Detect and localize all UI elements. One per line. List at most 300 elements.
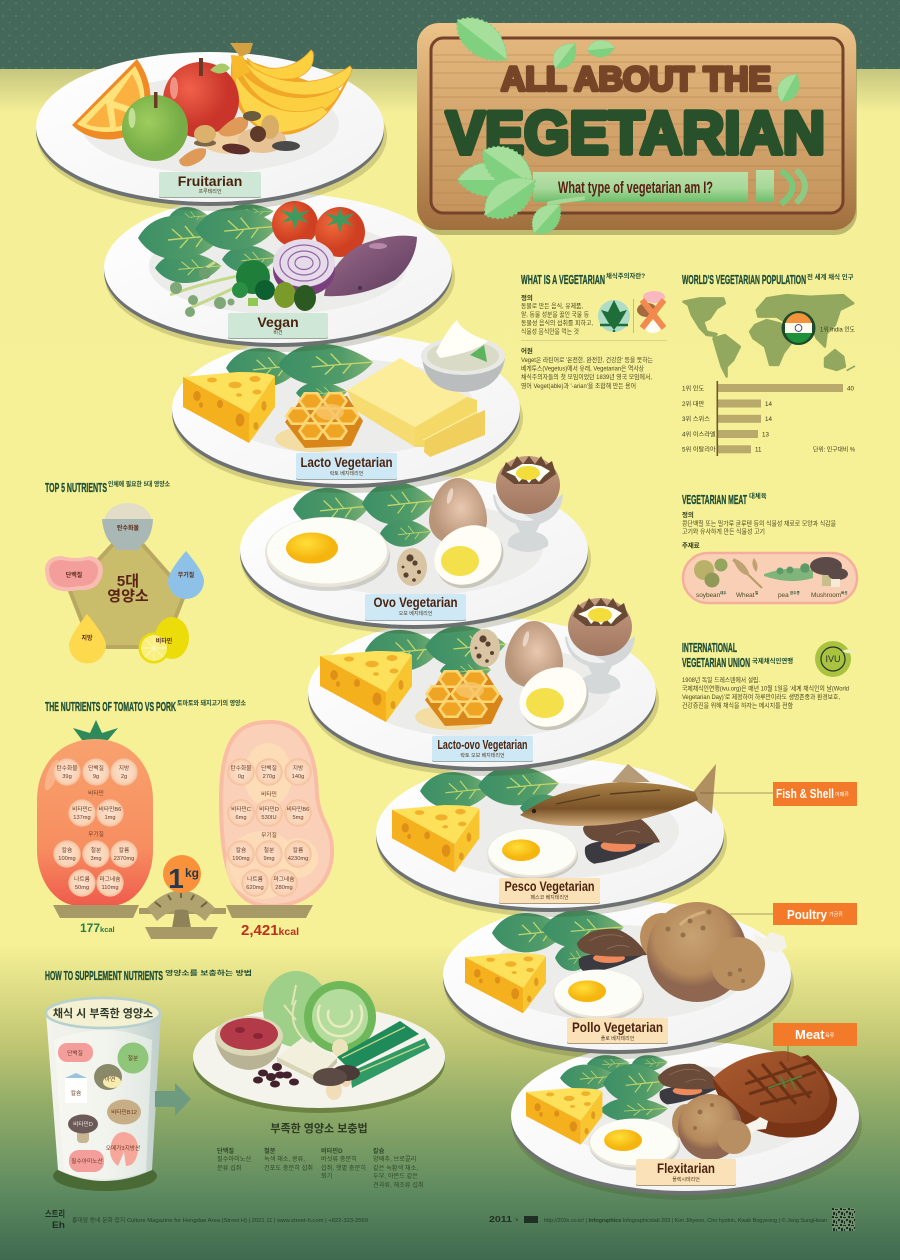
title line two: VEGETARIAN [446, 100, 825, 166]
weight: 1kg: kg [185, 866, 199, 880]
column: calcium: 두부, 아몬드 같은 [373, 1172, 418, 1180]
tomato values: 9g [93, 774, 99, 780]
tomato values: 칼슘 [62, 846, 72, 854]
label: vegan [228, 313, 328, 339]
plate: flexitarian [511, 1041, 862, 1200]
pork values: 단백질 [261, 764, 277, 772]
icon: protein: 단백질 [66, 571, 82, 579]
label: lacto: Lacto Vegetarian [300, 454, 392, 470]
lettuce [263, 971, 329, 1047]
label: pollo: 폴로 베지테리언 [601, 1035, 635, 1042]
roast chicken [640, 902, 787, 1002]
sweet potato [324, 236, 417, 296]
title line one: ALL ABOUT THE [501, 60, 771, 98]
column: iron: 건포도 충분히 섭취 [264, 1164, 313, 1172]
herbs [170, 262, 270, 317]
icon: fat drop: 지방 [81, 634, 93, 642]
fried egg [589, 1118, 680, 1170]
bar chart: 13 [762, 432, 769, 438]
half boiled egg [509, 656, 599, 742]
label: flexitarian [636, 1159, 736, 1186]
icon: rice bowl [102, 503, 153, 550]
tofu [277, 1038, 337, 1082]
panel: tomato vs pork [37, 698, 332, 939]
label: pesco: Pesco Vegetarian [504, 878, 594, 894]
cabbage [304, 981, 376, 1057]
nuts [179, 111, 300, 166]
definition text: 식물성 음식만을 먹는 것 [521, 326, 579, 336]
ingredient labels [696, 590, 848, 599]
icon: mineral drop [168, 551, 204, 599]
bananas [230, 43, 352, 134]
subtitle bar: What type of vegetarian am I? [558, 178, 713, 197]
protein [58, 1043, 93, 1062]
definition text: 알, 동물 성분을 끓인 국물 등 [521, 310, 589, 318]
plate caption: 부족한 영양소 보충법 [270, 1121, 368, 1135]
icon: leaves [448, 8, 805, 241]
pork values: 비타민C [231, 805, 251, 813]
heading: TOP 5 NUTRIENTS [45, 480, 107, 495]
label: lacto: 락토 베지테리언 [330, 470, 364, 477]
scale [53, 890, 313, 939]
logo: 2011: 2011 [489, 1215, 513, 1224]
pork values: 나트륨 [247, 875, 263, 883]
tag: poultry: 가금류 [829, 911, 843, 918]
logo: street h: 스트리 [45, 1209, 65, 1219]
ingredient labels: 밀 [755, 590, 758, 595]
amino acids: 필수아미노산 [71, 1157, 103, 1165]
heading: INTERNATIONAL [682, 640, 737, 655]
pork values: 탄수화물 [231, 764, 251, 772]
steak [713, 1051, 837, 1138]
onion [273, 239, 335, 296]
vitamin D: 비타민D [73, 1120, 93, 1128]
heading [682, 640, 793, 670]
center label [107, 573, 149, 605]
body text [682, 675, 849, 710]
icon: ivu logo [815, 641, 855, 677]
butter [347, 358, 485, 457]
label: vegan: Vegan [257, 314, 299, 330]
definition: 주재료 [682, 540, 700, 550]
tomato values: 50mg [75, 885, 89, 891]
honeycomb [275, 392, 363, 452]
column: vitamin D: 비타민D [321, 1147, 343, 1155]
black beans [253, 1063, 299, 1088]
cheese [392, 805, 479, 872]
tomato values: 3mg [90, 856, 102, 862]
definition [682, 510, 836, 550]
tomato values: 단백질 [88, 764, 104, 772]
label: india: 1위 India 인도 [820, 326, 855, 334]
definition: 콩단백질 또는 밀가루 글루텐 등의 식물성 재료로 모양과 식감을 [682, 518, 836, 528]
heading: HOW TO SUPPLEMENT NUTRIENTS [45, 968, 163, 983]
pork values: 140g [292, 774, 304, 780]
tomato values: 칼륨 [119, 846, 129, 854]
olives [274, 282, 316, 311]
pork values: 칼륨 [293, 846, 303, 854]
label: lacto-ovo [432, 736, 533, 762]
label: fruitarian: Fruitarian [178, 173, 242, 189]
protein: 단백질 [67, 1049, 83, 1057]
column: iron: 녹색 채소, 콩류, [264, 1155, 305, 1163]
tomato values: 비타민C [72, 805, 92, 813]
heading: 인체에 필요한 5대 영양소 [108, 479, 170, 488]
panel: international vegetarian union [682, 640, 855, 710]
pork values: 마그네슘 [274, 875, 294, 883]
tag: meat: 육류 [825, 1033, 835, 1039]
bar chart: 1위 인도 [682, 384, 705, 392]
tag: fish and shell: 어패류 [835, 791, 849, 798]
omega 3: 오메가3지방산 [106, 1144, 141, 1152]
panel: what is a vegetarian [521, 271, 667, 390]
bar chart: 4위 이스라엘 [682, 430, 716, 438]
label: lacto [296, 453, 397, 480]
heading: VEGETARIAN UNION [682, 655, 750, 670]
tag: meat [773, 1023, 857, 1062]
tomato values: 비타민B6 [99, 805, 121, 813]
icon: fat drop [69, 614, 106, 663]
tomato values: 철분 [91, 846, 101, 854]
tomato values: 39g [62, 774, 72, 780]
calcium [65, 1073, 87, 1103]
bar chart: 2위 대만 [682, 400, 705, 408]
panel: world vegetarian population [682, 272, 855, 456]
leaves [560, 1055, 668, 1122]
credit right: http://203x.co.kr/ | Infographics Infographicslab 203 | Kim Jihyeon, Cho hyobin, Kwak Bogyeong | © Jang SungHwan [544, 1217, 827, 1224]
icon: pea [764, 563, 813, 581]
amino acids [69, 1150, 104, 1172]
tomato values: 137mg [73, 815, 91, 821]
broccoli [232, 260, 275, 306]
pork values: 무기질 [261, 831, 277, 839]
bar chart: 단위: 인구대비 % [813, 446, 855, 454]
yogurt bowl [421, 320, 505, 392]
bar chart: 3위 스위스 [682, 415, 710, 423]
pork values: 비타민 [261, 790, 277, 798]
leaves [293, 482, 434, 547]
ingredient labels: 완두콩 [790, 590, 800, 595]
pork values: 270g [263, 774, 275, 780]
panel: how to supplement [45, 968, 445, 1191]
whole egg [505, 621, 563, 688]
heading: 채식주의자란? [606, 271, 645, 280]
mussel [583, 811, 660, 864]
label: fruitarian [159, 172, 261, 198]
label: pesco: 페스코 베지테리언 [530, 894, 569, 901]
etymology text: 채식주의자들의 첫 모임이었던 1839년 영국 모임에서, [521, 372, 652, 381]
vitamin D [68, 1114, 98, 1143]
definition text: 동물로 만든 음식, 유제품, [521, 301, 583, 310]
mussel [658, 1064, 722, 1104]
definition text: 동물성 음식의 섭취를 피하고, [521, 318, 593, 327]
ingredient labels: soybean [696, 592, 721, 599]
label: lacto-ovo: 락토 오보 베지테리언 [460, 752, 505, 759]
pork values: 비타민D [259, 805, 279, 813]
tomato values: 무기질 [88, 830, 104, 838]
column: protein: 필수아미노산 [217, 1155, 251, 1163]
credit left: 홍대앞 동네 문화 잡지 Culture Magazine for Hongdae Area (Street H) | 2021 11 | www.street-h.com | +822-323-2569 [72, 1216, 368, 1224]
plate: ovo [240, 456, 591, 634]
column: calcium: 견과류, 해조류 섭취 [373, 1181, 424, 1189]
arrow [155, 1083, 191, 1116]
icon: protein [45, 556, 103, 591]
pork values: 620mg [246, 885, 264, 891]
top band [0, 0, 900, 69]
tomato values: 2g [121, 774, 127, 780]
pork values: 철분 [264, 846, 274, 854]
label: flexitarian: 플렉시테리언 [672, 1176, 700, 1183]
pork values: 530IU [261, 815, 277, 821]
calcium: 칼슘 [71, 1089, 81, 1097]
label: ovo: 오보 베지테리언 [399, 610, 433, 617]
value: pork kcal: 2,421kcal [241, 922, 299, 939]
logo: street h: Eh [52, 1220, 65, 1230]
etymology text: 어원 [521, 346, 533, 355]
pentagon [70, 528, 185, 647]
icon: no animals [634, 291, 665, 333]
label: vegan: 비건 [273, 329, 283, 336]
heading: THE NUTRIENTS OF TOMATO VS PORK [45, 699, 176, 714]
label: lacto-ovo: Lacto-ovo Vegetarian [438, 737, 528, 752]
label: pollo: Pollo Vegetarian [572, 1019, 663, 1035]
label: ovo: Ovo Vegetarian [374, 594, 458, 610]
icon: wheat [733, 558, 762, 588]
zinc [94, 1064, 122, 1090]
qr code [832, 1208, 855, 1231]
definition: 정의 [682, 510, 694, 519]
iron [118, 1042, 148, 1074]
label: flexitarian: Flexitarian [657, 1160, 715, 1176]
heading: 전 세계 채식 인구 [807, 272, 854, 281]
footer [45, 1208, 855, 1231]
etymology text: Veget은 라틴어로 '온전한, 완전한, 건강한' 등을 뜻하는 [521, 355, 653, 364]
chicken leg [672, 1094, 768, 1160]
ingredient labels: 대두 [720, 590, 727, 595]
icon: mushroom [810, 557, 848, 587]
icon: mineral drop: 무기질 [178, 571, 194, 579]
column: vitamin D: 버섯류 충분히 [321, 1155, 357, 1163]
tag: poultry: Poultry [787, 907, 828, 922]
pork values: 비타민B6 [287, 805, 309, 813]
icon: plant [598, 300, 630, 332]
panel: top 5 nutrients [45, 479, 204, 664]
cheese [465, 953, 546, 1013]
label: pollo [567, 1018, 668, 1044]
icon: rice bowl: 탄수화물 [117, 524, 140, 532]
subtitle bar [533, 170, 774, 202]
body text: 1908년 독일 드레스덴에서 설립. [682, 675, 760, 684]
omega 3 [106, 1132, 141, 1166]
value: tomato kcal: 177kcal [80, 921, 115, 935]
heading: VEGETARIAN MEAT [682, 492, 747, 507]
column: protein: 단백질 [217, 1147, 234, 1155]
plate: pollo [443, 900, 794, 1059]
leaves [365, 626, 506, 683]
cheese [320, 651, 412, 722]
body text: Vegetarian Day)'로 제정하여 하루만이라도 생명존중과 환경보호, [682, 692, 840, 701]
mussel [577, 929, 647, 973]
tomato values: 마그네슘 [100, 875, 120, 883]
mushroom [313, 1065, 360, 1100]
column: protein: 분류 섭취 [217, 1164, 242, 1172]
plate: lacto-ovo [308, 598, 659, 776]
cheese [183, 372, 275, 443]
column: calcium: 칼슘 [373, 1147, 385, 1155]
pork values: 190mg [232, 856, 250, 862]
spinach leaves [138, 204, 277, 283]
icon: soybeans [694, 558, 728, 588]
fried egg [553, 970, 644, 1021]
ingredient labels: Wheat [736, 592, 755, 599]
pork values [227, 758, 312, 897]
definition text [521, 293, 593, 336]
seaweed [337, 1021, 430, 1088]
glass [46, 998, 161, 1191]
tag: poultry [730, 903, 857, 925]
heading: 영양소를 보충하는 방법 [165, 968, 252, 977]
logo: 2011 [489, 1215, 538, 1224]
iron: 철분 [128, 1054, 138, 1062]
center label: 영양소 [107, 588, 149, 605]
leaves [492, 910, 624, 971]
etymology text [521, 346, 653, 390]
green apple [122, 92, 188, 161]
tomato [37, 720, 153, 906]
icon: india badge [782, 311, 816, 345]
pork values: 9mg [263, 856, 275, 862]
capsule: ingredients [683, 553, 857, 603]
tomato values: 110mg [102, 885, 118, 891]
pork values: 280mg [275, 885, 293, 891]
ingredient labels: 버섯 [841, 590, 848, 595]
pork values: 칼슘 [236, 846, 246, 854]
etymology text: 베게투스(Vegetus)에서 유래, Vegetarian은 역사상 [521, 364, 644, 372]
quail egg [397, 548, 427, 586]
tomato values: 2370mg [114, 856, 134, 862]
icon: ivu logo: IVU [825, 654, 841, 664]
ingredient labels: pea [778, 592, 789, 599]
egg cup [565, 598, 635, 694]
supplement plate [193, 971, 445, 1113]
red apple [163, 58, 239, 138]
etymology text: 영어 Veget(able)과 '-arian'을 조합해 만든 용어 [521, 381, 636, 390]
column: calcium: 양배추, 브로콜리 [373, 1155, 416, 1163]
heading [682, 491, 767, 507]
pork values: 6mg [235, 815, 247, 821]
fish [520, 764, 716, 826]
tag: fish and shell [700, 782, 857, 806]
tag: meat: Meat [795, 1027, 825, 1042]
title board [417, 8, 857, 241]
tomatoes [272, 201, 365, 257]
bar chart: 5위 이탈리아 [682, 446, 716, 454]
half boiled egg [424, 514, 514, 600]
zinc: 아연 [105, 1075, 115, 1083]
column: vitamin D: 섭취, 햇볕 충분히 [321, 1164, 366, 1172]
leaves [226, 344, 373, 404]
tag: fish and shell: Fish & Shell [776, 786, 834, 801]
tomato values: 100mg [58, 856, 76, 862]
fried egg [265, 517, 390, 591]
whole egg [429, 478, 487, 545]
egg cup [493, 456, 563, 552]
fried egg [487, 828, 578, 880]
pork [221, 722, 332, 906]
column: iron: 철분 [264, 1147, 276, 1155]
bar chart: 14 [765, 416, 772, 423]
definition text: 정의 [521, 293, 533, 302]
weight: 1kg: 1 [168, 863, 184, 894]
body text: 국제채식인연맹(ivu.org)은 매년 10월 1일을 '세계 채식인의 날(World [682, 684, 849, 692]
plate: lacto [172, 320, 523, 493]
heading: 대체육 [749, 491, 767, 500]
plate: fruitarian [36, 43, 387, 211]
label: ovo [365, 594, 466, 621]
glass: 채식 시 부족한 영양소 [53, 1006, 153, 1020]
plate: vegan [104, 193, 455, 352]
panel: vegetarian meat [682, 491, 857, 603]
plate: pesco [376, 758, 727, 917]
vitamin B12: 비타민B12 [111, 1108, 137, 1116]
tomato values: 비타민 [88, 789, 104, 797]
ingredient labels: Mushroom [811, 592, 841, 599]
icon: lemon: 비타민 [156, 637, 172, 645]
label: fruitarian: 프루테리언 [198, 188, 222, 195]
orange slice [72, 59, 150, 140]
bar chart [682, 381, 855, 456]
leaves [420, 766, 571, 821]
icon: lemon [138, 617, 189, 664]
honeycomb [415, 670, 503, 730]
pork values: 지방 [293, 764, 304, 772]
icon: arcs [781, 170, 805, 204]
column: vitamin D [321, 1147, 366, 1180]
quail egg [470, 629, 500, 667]
bar chart: 14 [765, 401, 772, 408]
tomato values: 지방 [119, 764, 130, 772]
label: pesco [499, 878, 600, 904]
definition: 고기와 유사하게 만든 식물성 고기 [682, 526, 765, 536]
pork values: 4230mg [288, 856, 308, 862]
world map [683, 295, 855, 377]
column: calcium [373, 1147, 424, 1189]
logo: street h [45, 1209, 65, 1230]
logo: 2011: × [515, 1218, 519, 1224]
bar chart: 11 [755, 446, 762, 454]
tomato values: 나트륨 [74, 875, 90, 883]
tomato values: 탄수화물 [57, 764, 77, 772]
vitamin B12 [107, 1100, 141, 1124]
heading: 토마토와 돼지고기의 영양소 [177, 698, 246, 707]
column: iron [264, 1147, 313, 1172]
tomato values [53, 758, 138, 897]
column: calcium: 같은 녹황색 채소, [373, 1164, 418, 1172]
heading: WHAT IS A VEGETARIAN [521, 272, 605, 287]
heading: 국제채식인연맹 [752, 656, 793, 665]
pork values: 5mg [292, 815, 304, 821]
bar chart: 40 [847, 386, 854, 392]
weight: 1kg [163, 855, 201, 894]
center label: 5대 [117, 573, 139, 590]
tomato values: 1mg [104, 815, 116, 821]
pork values: 0g [238, 774, 244, 780]
red bean bowl [215, 1016, 283, 1070]
cheese [526, 1088, 602, 1145]
column: protein [217, 1147, 251, 1172]
column: vitamin D: 쬐기 [321, 1172, 332, 1180]
body text: 건강증진을 위해 채식을 하자는 메시지를 전함 [682, 700, 793, 710]
